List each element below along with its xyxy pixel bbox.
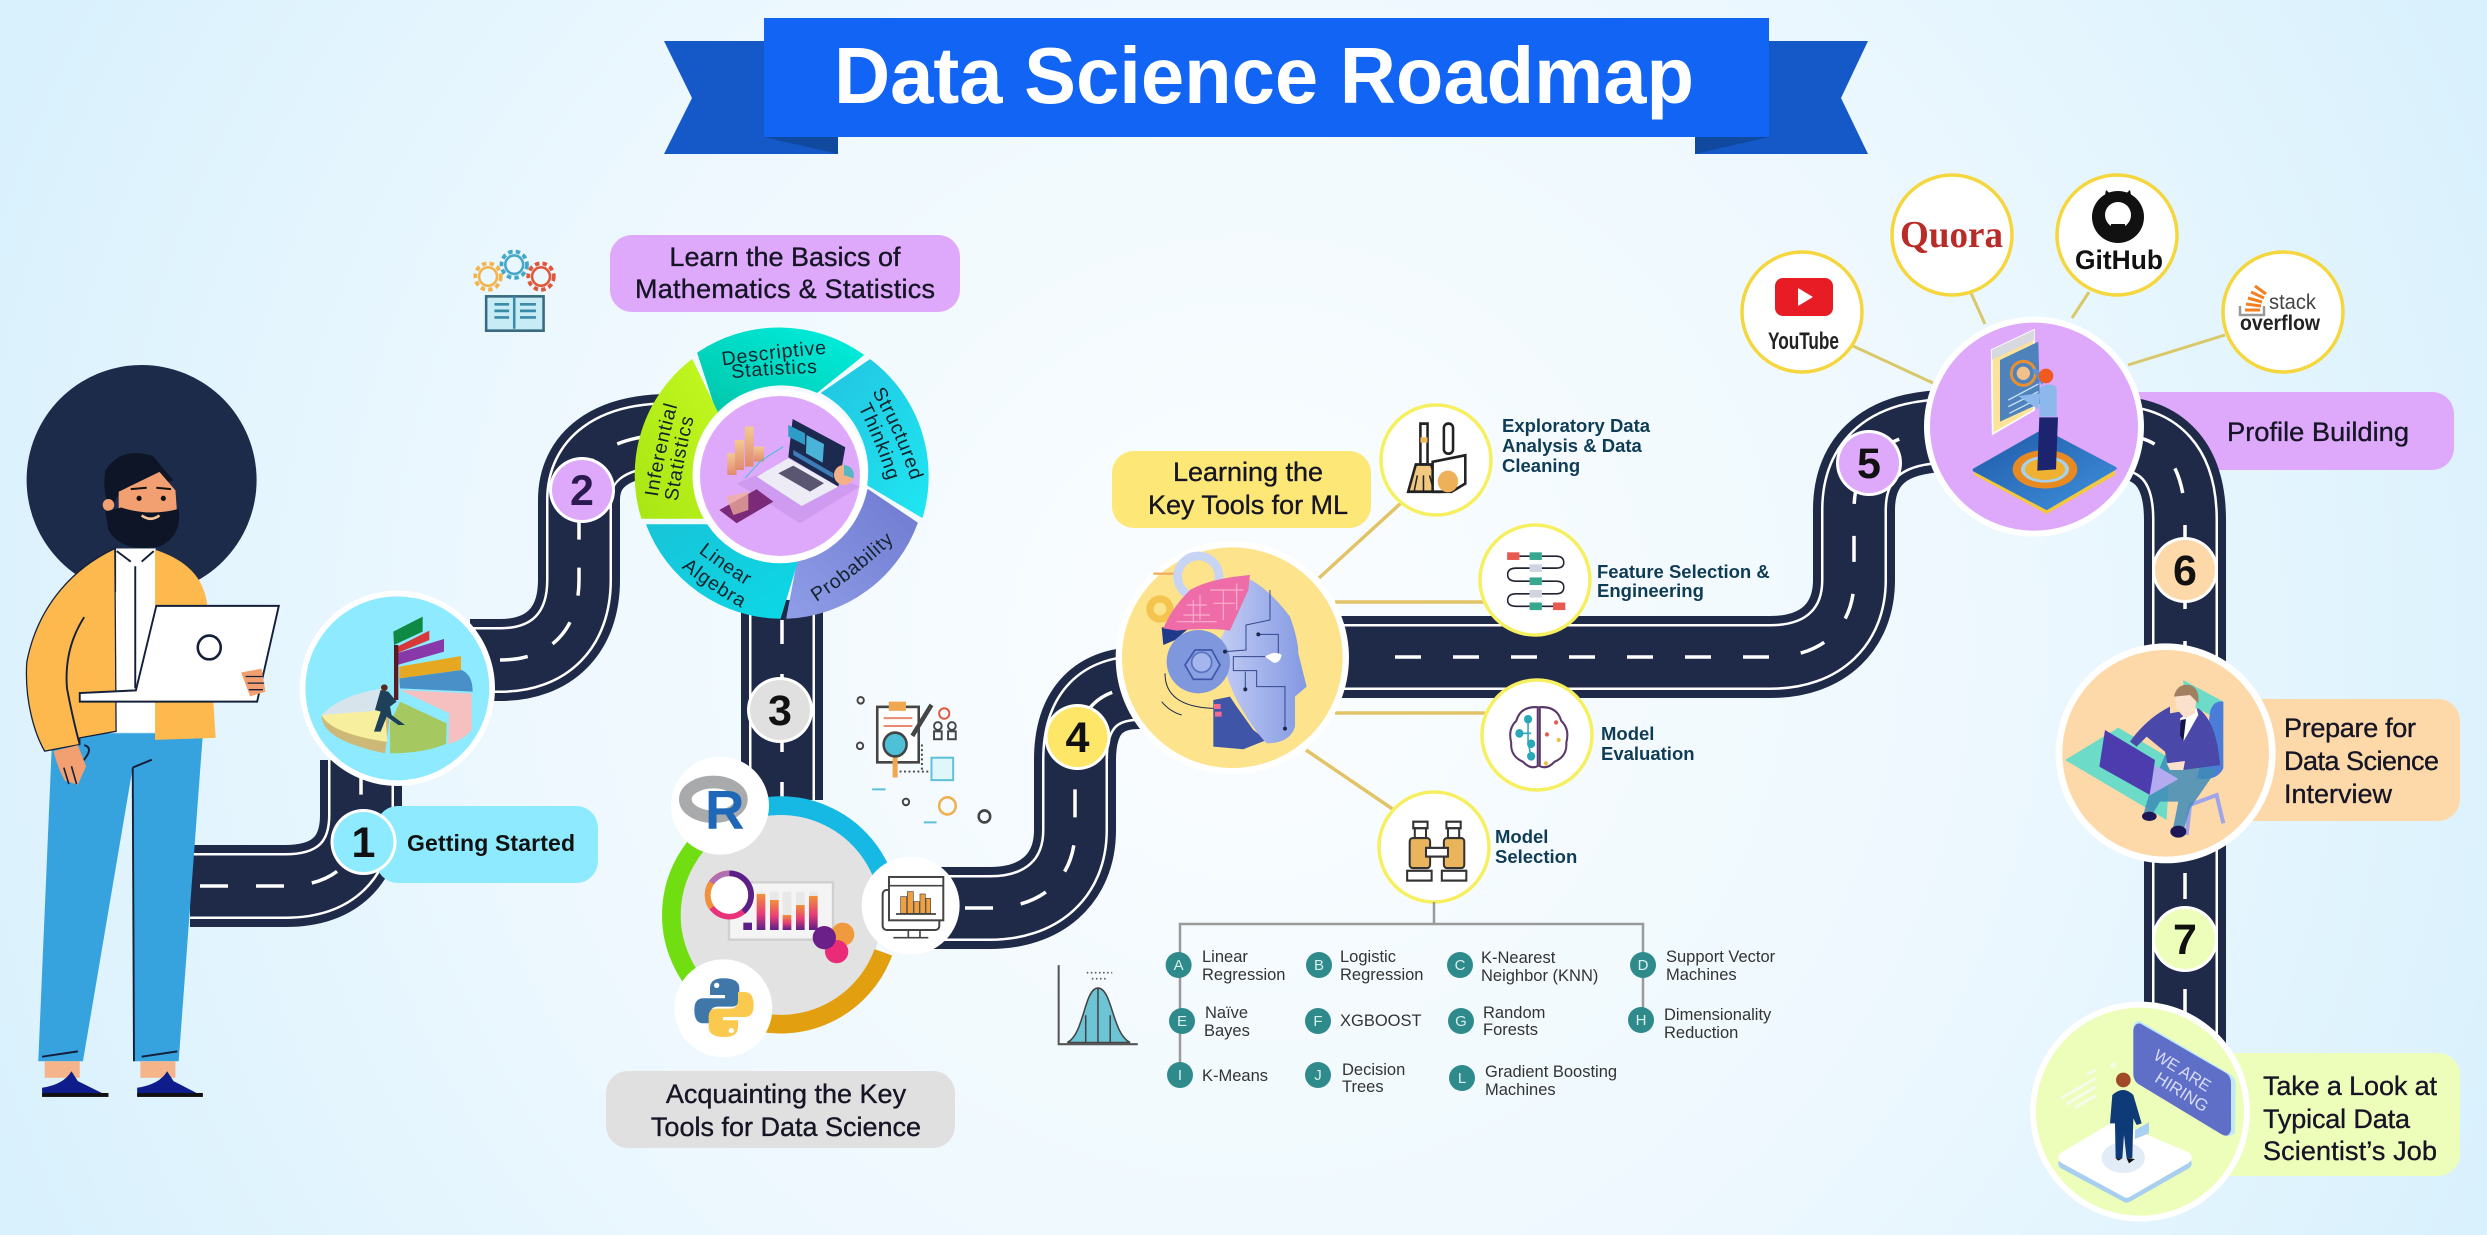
text: Feature Selection & [1597, 561, 1770, 582]
logo: github: GitHub [2075, 245, 2163, 275]
badge: 2: 2 [570, 467, 594, 515]
dark circle behind person [27, 365, 257, 595]
segment: probability [786, 489, 918, 619]
node: model evaluation [1482, 680, 1695, 790]
item: naive bayes [1169, 1004, 1250, 1040]
label: typical data scientist job [2180, 1053, 2460, 1176]
logo: youtube: YouTube [1768, 328, 1839, 355]
text: Model [1601, 723, 1654, 744]
label: prepare for interview [2200, 699, 2460, 821]
road: segment 1 [190, 760, 361, 886]
connector lines to resources [1853, 292, 2225, 383]
logo: quora: Quora [1900, 214, 2003, 256]
label: key tools for ml: Key Tools for ML [1148, 490, 1348, 520]
badge: 2 [549, 457, 615, 523]
title banner [664, 18, 1868, 154]
sign [2133, 1021, 2236, 1137]
item: k-means [1167, 1062, 1268, 1088]
icon: broom and dustpan [1408, 424, 1465, 492]
logo: quora [1892, 175, 2012, 295]
platform [1974, 432, 2115, 514]
ring arcs [671, 806, 886, 1024]
node: model selection: Selection [1495, 846, 1577, 867]
label: typical data scientist job: Scientist’s Job [2263, 1136, 2437, 1166]
segment: descriptive statistics: Statistics [732, 360, 816, 378]
item: support vector machines: D [1638, 957, 1649, 974]
icon: analysis clipboard [857, 697, 990, 822]
circle: profile building illustration [1924, 317, 2144, 537]
sign text: WE ARE [2150, 1046, 2215, 1096]
icon: R logo: R [705, 780, 744, 841]
item: random forests: Forests [1483, 1021, 1538, 1039]
node: model selection [1379, 792, 1577, 902]
item: dimensionality reduction: Dimensionality [1664, 1006, 1772, 1024]
road: segment 6 and 7 [2110, 437, 2185, 1060]
circle: ai head [1116, 541, 1349, 774]
item: dimensionality reduction: H [1636, 1012, 1646, 1029]
label: profile building [2090, 392, 2454, 470]
item: k-nearest neighbor: Neighbor (KNN) [1481, 967, 1598, 985]
label: acquainting tools: Acquainting the Key [666, 1079, 907, 1109]
item: decision trees: Trees [1342, 1078, 1384, 1096]
item: xgboost: XGBOOST [1340, 1012, 1422, 1030]
item: gradient boosting machines: L [1458, 1070, 1466, 1087]
label: prepare for interview: Data Science [2284, 746, 2439, 776]
item: support vector machines [1630, 948, 1776, 984]
node: exploratory data analysis: Cleaning [1502, 455, 1580, 476]
text: Model [1495, 826, 1548, 847]
label: key tools for ml [1112, 451, 1371, 528]
title text: Data Science Roadmap [834, 31, 1694, 120]
speed lines [2061, 1070, 2096, 1108]
road: segment 2 [470, 435, 670, 660]
road: segment 5 [1330, 431, 1950, 657]
item: k-nearest neighbor: C [1455, 957, 1466, 974]
logo: youtube [1742, 252, 1862, 372]
segment: probability: Probability [810, 533, 892, 602]
segment: linear algebra: Linear [700, 542, 752, 584]
badge: 3: 3 [768, 687, 792, 735]
badge: 5 [1836, 430, 1902, 496]
platform [2064, 1133, 2186, 1197]
segment: structured thinking [821, 359, 929, 518]
circle: tools for data science [671, 757, 960, 1057]
segment: inferential statistics: Inferential [644, 403, 677, 496]
badge: 3 [747, 677, 813, 743]
item: dimensionality reduction: Reduction [1664, 1024, 1738, 1042]
circle: getting started pie stairs [300, 591, 495, 786]
item: logistic regression: B [1314, 957, 1324, 974]
badge: 7 [2152, 906, 2218, 972]
segment: inferential statistics [634, 359, 718, 519]
item: support vector machines: Support Vector [1666, 948, 1776, 966]
badge: 6 [2152, 537, 2218, 603]
segment: descriptive statistics [697, 328, 864, 413]
segment: structured thinking: Structured [874, 388, 924, 480]
item: k-nearest neighbor [1447, 949, 1598, 985]
badge: 4: 4 [1066, 714, 1090, 762]
node: model evaluation: Evaluation [1601, 743, 1695, 764]
segment: linear algebra [646, 524, 798, 619]
icon: flow steps [1507, 552, 1565, 610]
badge: 1 with getting started label: Getting Started [407, 830, 575, 856]
person with laptop [26, 365, 279, 1097]
road: segment 4 [930, 688, 1140, 908]
label: acquainting tools: Tools for Data Science [651, 1112, 921, 1142]
item: decision trees: J [1314, 1067, 1322, 1084]
item: dimensionality reduction [1628, 1006, 1772, 1042]
badge: 7: 7 [2173, 916, 2197, 964]
phone screen [1992, 330, 2034, 434]
badge: 5: 5 [1857, 440, 1881, 488]
item: gradient boosting machines: Machines [1485, 1081, 1556, 1099]
person [2135, 1122, 2149, 1139]
person [2037, 417, 2058, 471]
icon: python logo [674, 959, 772, 1057]
label: profile building: Profile Building [2227, 417, 2409, 447]
item: random forests [1448, 1004, 1545, 1039]
node: exploratory data analysis: Analysis & Data [1502, 435, 1643, 456]
item: linear regression: A [1174, 957, 1184, 974]
segment: descriptive statistics: Descriptive [722, 342, 826, 366]
label: getting started [376, 806, 598, 883]
icon: book with gears [475, 251, 554, 331]
badge: 6: 6 [2173, 547, 2197, 595]
icon: monitor chart [862, 857, 960, 955]
badge: 1 with getting started label [330, 806, 598, 883]
label: typical data scientist job: Take a Look at [2263, 1071, 2437, 1101]
item: support vector machines: Machines [1666, 966, 1737, 984]
item: linear regression: Linear [1202, 948, 1248, 966]
wheel: mathematics topics [634, 328, 929, 619]
node: feature selection [1480, 525, 1770, 635]
laptop [80, 606, 279, 702]
item: linear regression [1166, 948, 1285, 984]
icon: binoculars [1407, 822, 1466, 881]
item: gradient boosting machines [1449, 1063, 1617, 1099]
item: gradient boosting machines: Gradient Boosting [1485, 1063, 1617, 1081]
logo: stack overflow: stack [2269, 291, 2316, 314]
badge: 4 [1044, 704, 1110, 770]
item: xgboost: F [1313, 1013, 1323, 1030]
node: feature selection: Engineering [1597, 580, 1704, 601]
segment: inferential statistics: Statistics [664, 416, 693, 500]
item: naive bayes: Naïve [1205, 1004, 1248, 1022]
item: naive bayes: Bayes [1204, 1022, 1250, 1040]
road: segment 3 [741, 600, 823, 800]
node: exploratory data analysis [1381, 405, 1651, 515]
circle: interview illustration [2056, 643, 2276, 863]
item: linear regression: Regression [1202, 966, 1285, 984]
item: k-means: I [1178, 1067, 1182, 1084]
logo: stack overflow [2223, 252, 2343, 372]
dashboard chart card [708, 873, 854, 963]
text: Exploratory Data [1502, 415, 1651, 436]
item: logistic regression: Logistic [1340, 948, 1396, 966]
label: typical data scientist job: Typical Data [2263, 1104, 2411, 1134]
model list [1166, 948, 1776, 1099]
segment: linear algebra: Algebra [681, 560, 744, 608]
icon: bell curve [1059, 965, 1138, 1044]
badge: 1 with getting started label: 1 [352, 819, 375, 867]
label: mathematics and statistics: Learn the Basics of [669, 242, 901, 272]
segment: structured thinking: Thinking [860, 402, 898, 480]
item: random forests: Random [1483, 1004, 1545, 1022]
label: mathematics and statistics: Mathematics & Statistics [635, 274, 935, 304]
label: prepare for interview: Prepare for [2284, 713, 2416, 743]
icon: brain [1510, 707, 1567, 767]
item: logistic regression: Regression [1340, 966, 1423, 984]
circle: hiring illustration [2030, 1002, 2250, 1222]
item: k-means: K-Means [1202, 1067, 1268, 1085]
item: decision trees [1305, 1061, 1405, 1096]
item: decision trees: Decision [1342, 1061, 1405, 1079]
wheel centre: laptop analytics [693, 389, 867, 563]
item: naive bayes: E [1177, 1013, 1187, 1030]
item: logistic regression [1306, 948, 1423, 984]
connector lines from ai head [1306, 503, 1485, 810]
item: xgboost [1305, 1008, 1422, 1034]
logo: github [2057, 175, 2177, 295]
label: acquainting tools [606, 1071, 955, 1148]
label: prepare for interview: Interview [2284, 779, 2392, 809]
label: key tools for ml: Learning the [1173, 457, 1323, 487]
label: mathematics and statistics [610, 235, 960, 312]
icon: R logo [671, 757, 769, 855]
item: random forests: G [1455, 1013, 1467, 1030]
model tree connectors [1180, 902, 1643, 1075]
circle: hiring illustration: HIRING [2152, 1068, 2212, 1116]
item: k-nearest neighbor: K-Nearest [1481, 949, 1556, 967]
logo: stack overflow: overflow [2240, 312, 2321, 335]
